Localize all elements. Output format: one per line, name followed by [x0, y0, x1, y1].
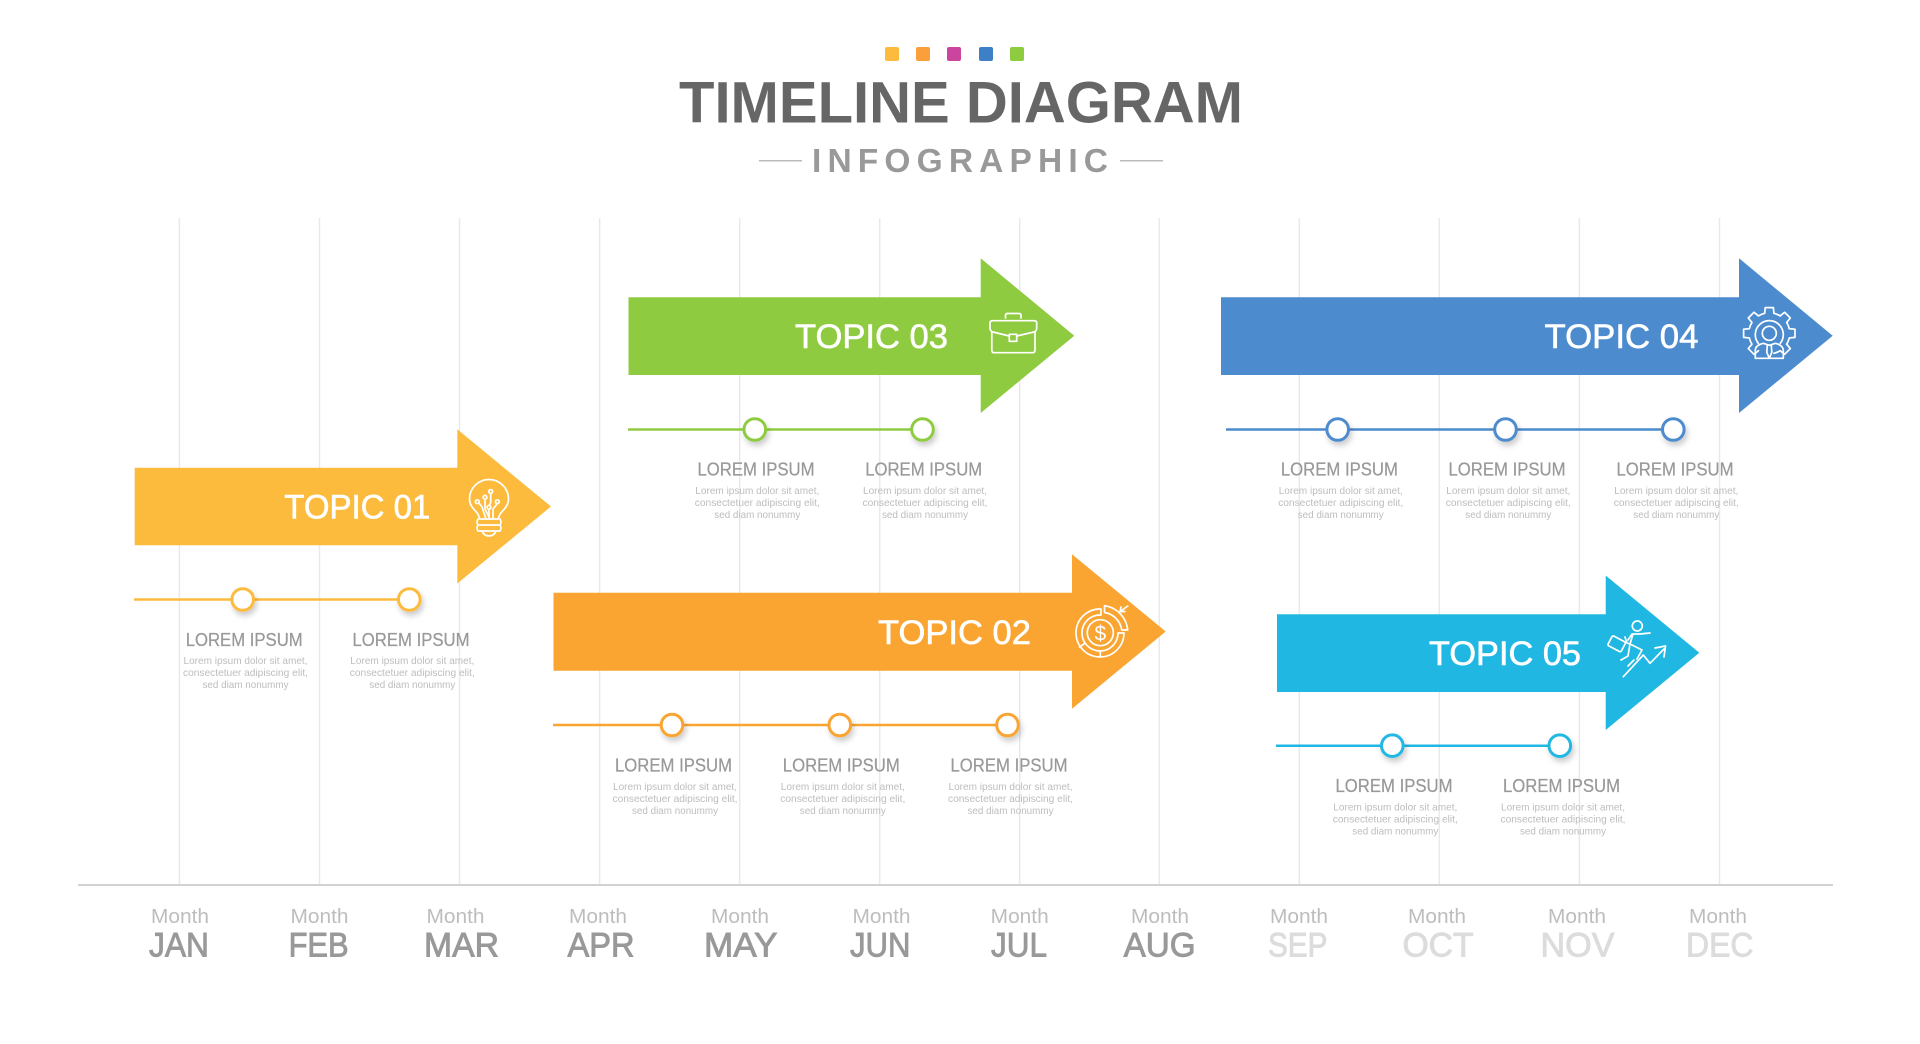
milestone text — [1614, 460, 1739, 521]
milestone text — [183, 630, 308, 691]
month axis labels: MAR — [424, 926, 499, 964]
milestone text: Lorem ipsum dolor sit amet, — [350, 655, 474, 667]
milestone text: LOREM IPSUM — [783, 756, 900, 776]
arrow: topic 05 — [1277, 576, 1699, 730]
milestone text: Lorem ipsum dolor sit amet, — [613, 781, 737, 793]
milestone text: sed diam nonummy — [1352, 826, 1439, 838]
month axis labels: Month — [426, 906, 484, 928]
panel: topic 03 — [628, 258, 1074, 521]
icon: gear person — [1743, 307, 1795, 359]
panel: topic 05 — [1276, 576, 1699, 838]
label: topic 03: TOPIC 03 — [795, 318, 948, 356]
milestone text — [1500, 776, 1626, 838]
icon: running businessman — [1607, 621, 1666, 677]
milestone text: consectetuer adipiscing elit, — [862, 497, 988, 509]
milestone text: consectetuer adipiscing elit, — [612, 793, 738, 805]
milestone text: LOREM IPSUM — [615, 756, 732, 776]
milestone text — [948, 756, 1073, 817]
milestone text: Lorem ipsum dolor sit amet, — [695, 485, 819, 497]
month axis labels: APR — [568, 926, 634, 964]
milestone text: sed diam nonummy — [800, 805, 887, 817]
timeline: topic 05 — [1276, 735, 1571, 756]
milestone text: Lorem ipsum dolor sit amet, — [1333, 802, 1457, 814]
month axis labels: Month — [852, 906, 910, 928]
milestone text: LOREM IPSUM — [1336, 776, 1452, 796]
month axis labels: DEC — [1686, 926, 1754, 964]
milestone text: consectetuer adipiscing elit, — [1614, 497, 1739, 509]
milestone text: Lorem ipsum dolor sit amet, — [1501, 802, 1625, 814]
month axis labels: SEP — [1268, 926, 1327, 964]
label: topic 01: TOPIC 01 — [284, 489, 430, 527]
month axis labels: Month — [991, 906, 1049, 928]
timeline: topic 03 — [628, 419, 933, 440]
milestone text: LOREM IPSUM — [1448, 460, 1566, 480]
icon: light bulb — [470, 480, 508, 536]
milestone text — [612, 756, 738, 817]
milestone text: consectetuer adipiscing elit, — [183, 667, 308, 679]
month axis labels: OCT — [1402, 926, 1474, 964]
milestone text: consectetuer adipiscing elit, — [1500, 814, 1626, 826]
arrow: topic 03 — [628, 258, 1074, 413]
month axis labels: Month — [1408, 906, 1466, 928]
label: topic 05: TOPIC 05 — [1429, 635, 1581, 673]
icon: dollar target — [1076, 606, 1128, 657]
month axis labels: Month — [1270, 906, 1328, 928]
month axis labels: Month — [1548, 906, 1606, 928]
month axis labels: JUL — [991, 926, 1047, 964]
milestone text: Lorem ipsum dolor sit amet, — [781, 781, 905, 793]
month axis labels: Month — [1689, 906, 1747, 928]
month axis labels: MAY — [704, 926, 778, 964]
milestone text — [780, 756, 905, 817]
milestone text: sed diam nonummy — [968, 805, 1054, 817]
milestone text: sed diam nonummy — [882, 509, 969, 521]
subtitle: INFOGRAPHIC — [812, 143, 1108, 180]
month axis labels: NOV — [1540, 926, 1614, 964]
milestone text — [1278, 460, 1403, 521]
month axis labels: Month — [711, 906, 769, 928]
month axis labels: Month — [1131, 906, 1189, 928]
icon glyph: dollar: $ — [1094, 622, 1106, 646]
milestone text: sed diam nonummy — [1465, 509, 1552, 521]
milestone text: consectetuer adipiscing elit, — [1446, 497, 1571, 509]
title: TIMELINE DIAGRAM — [679, 70, 1243, 136]
milestone text: Lorem ipsum dolor sit amet, — [863, 485, 987, 497]
milestone text: LOREM IPSUM — [1281, 460, 1398, 480]
milestone text: LOREM IPSUM — [698, 460, 814, 480]
milestone text: sed diam nonummy — [1520, 826, 1607, 838]
month axis labels: Month — [290, 906, 348, 928]
timeline: topic 04 — [1226, 419, 1684, 440]
panel: topic 01 — [134, 429, 551, 691]
month axis labels: Month — [151, 906, 209, 928]
milestone text — [695, 460, 820, 521]
month axis labels: Month — [569, 906, 627, 928]
timeline: topic 01 — [134, 589, 420, 610]
milestone text: consectetuer adipiscing elit, — [350, 667, 475, 679]
milestone text: sed diam nonummy — [1298, 509, 1384, 521]
milestone text: LOREM IPSUM — [186, 630, 303, 650]
milestone text: consectetuer adipiscing elit, — [695, 497, 820, 509]
milestone text: Lorem ipsum dolor sit amet, — [184, 655, 308, 667]
milestone text: Lorem ipsum dolor sit amet, — [1614, 485, 1738, 497]
month axis labels: JUN — [850, 926, 910, 964]
milestone text: sed diam nonummy — [369, 679, 456, 691]
milestone text: consectetuer adipiscing elit, — [948, 793, 1073, 805]
label: topic 04: TOPIC 04 — [1544, 318, 1698, 356]
milestone text: consectetuer adipiscing elit, — [1278, 497, 1403, 509]
milestone text: LOREM IPSUM — [1616, 460, 1734, 480]
arrow: topic 02 — [554, 554, 1166, 709]
milestone text: Lorem ipsum dolor sit amet, — [948, 781, 1072, 793]
arrow: topic 04 — [1221, 258, 1833, 413]
milestone text: LOREM IPSUM — [1503, 776, 1620, 796]
panel: topic 04 — [1221, 258, 1833, 521]
milestone text: consectetuer adipiscing elit, — [780, 793, 905, 805]
milestone text: LOREM IPSUM — [352, 630, 470, 650]
color dots — [885, 47, 1024, 61]
milestone text — [1446, 460, 1571, 521]
milestone text: consectetuer adipiscing elit, — [1333, 814, 1458, 826]
label: topic 02: TOPIC 02 — [878, 614, 1031, 652]
milestone text: Lorem ipsum dolor sit amet, — [1279, 485, 1403, 497]
milestone text: LOREM IPSUM — [865, 460, 982, 480]
milestone text: sed diam nonummy — [202, 679, 289, 691]
panel: topic 02 — [553, 554, 1166, 817]
arrow: topic 01 — [135, 429, 551, 584]
milestone text: Lorem ipsum dolor sit amet, — [1446, 485, 1570, 497]
icon: briefcase — [990, 314, 1037, 353]
milestone text: sed diam nonummy — [1633, 509, 1720, 521]
month axis labels: JAN — [149, 926, 209, 964]
milestone text — [862, 460, 988, 521]
milestone text: LOREM IPSUM — [950, 756, 1068, 776]
month axis labels: AUG — [1124, 926, 1196, 964]
milestone text: sed diam nonummy — [714, 509, 801, 521]
month axis labels — [149, 906, 1754, 964]
month axis labels: FEB — [289, 926, 349, 964]
timeline: topic 02 — [553, 714, 1018, 736]
milestone text — [350, 630, 475, 691]
milestone text: sed diam nonummy — [632, 805, 719, 817]
milestone text — [1333, 776, 1458, 838]
